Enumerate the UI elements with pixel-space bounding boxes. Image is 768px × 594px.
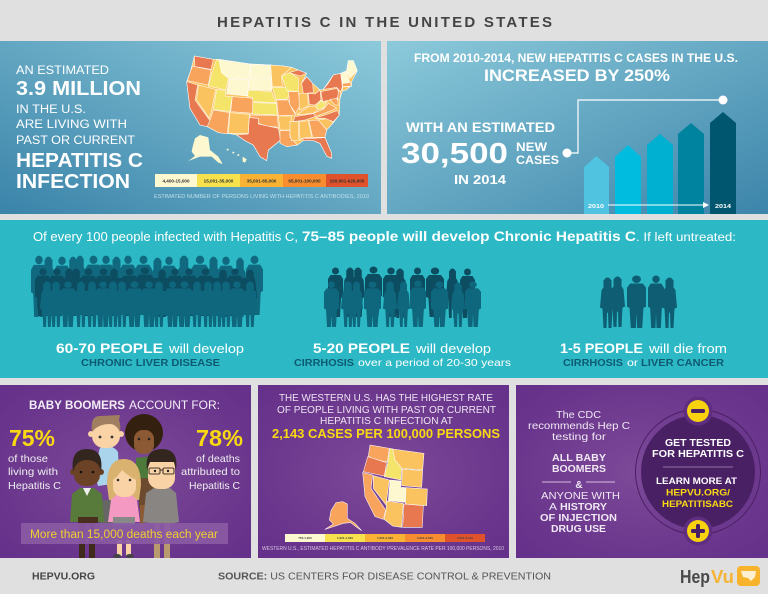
map: western states [325, 445, 427, 531]
label: 1-5 people: CIRRHOSIS [563, 357, 623, 369]
label: 5-20 people: 5-20 PEOPLE [313, 340, 410, 356]
text block: CDC recommends testing: & [575, 480, 583, 491]
text block: CDC recommends testing: The CDC [556, 410, 601, 421]
icon: minus [684, 396, 712, 426]
legend: persons living with antibodies: 35,001-65,000 [247, 178, 277, 184]
heading: increased by 250%: INCREASED BY 250% [484, 66, 670, 85]
icon: group of 1-5 people [600, 276, 677, 328]
legend: persons living with antibodies: 4,400-15,000 [162, 178, 190, 184]
panel: baby boomers [0, 385, 251, 558]
legend: prevalence rate: 1,001-1,500 [337, 536, 353, 540]
map: US states by persons living with antibodies [187, 56, 357, 164]
bar chart: rising arrows 2010 to 2014: 2014 [715, 204, 732, 210]
callout: 30,500 new cases: WITH AN ESTIMATED [406, 120, 555, 135]
label: 5-20 people [294, 340, 511, 369]
stat: 2,143 cases: 2,143 CASES PER 100,000 PERSONS [272, 426, 500, 441]
stat: 75% of those living with hepatitis C: of those [8, 453, 48, 465]
text block: 3.9 million: ARE LIVING WITH [16, 119, 127, 131]
text block: CDC recommends testing: OF INJECTION [540, 513, 617, 524]
stat: 75% of those living with hepatitis C: Hepatitis C [8, 480, 61, 492]
label: 5-20 people: CIRRHOSIS [294, 357, 354, 369]
text block: western US highest rate: THE WESTERN U.S. HAS THE HIGHEST RATE [279, 393, 493, 404]
label: 1-5 people: 1-5 PEOPLE [560, 340, 643, 356]
map caption: ESTIMATED NUMBER OF PERSONS LIVING WITH HEPATITIS C ANTIBODIES, 2010 [154, 194, 369, 200]
heading: increased by 250%: FROM 2010-2014, NEW HEPATITIS C CASES IN THE U.S. [414, 53, 738, 65]
logo: HepVu: Vu [711, 567, 734, 587]
heading: baby boomers account for [29, 400, 220, 412]
callout: 30,500 new cases: CASES [516, 155, 559, 167]
text block: CDC recommends testing: BOOMERS [552, 464, 606, 475]
stat: 75% of those living with hepatitis C: 75% [9, 425, 55, 451]
callout: get tested circle [636, 396, 760, 546]
icon: speech bubble with US map [737, 566, 760, 586]
text block: 3.9 million: 3.9 MILLION [16, 78, 141, 100]
text block: western US highest rate: OF PEOPLE LIVING WITH PAST OR CURRENT [277, 405, 496, 416]
text block: 3.9 million: PAST OR CURRENT [16, 135, 135, 147]
heading sentence: 75–85 people will develop Chronic Hepatitis C [302, 228, 636, 244]
person: front right, glasses, gray shirt [143, 449, 179, 558]
legend: prevalence rate: 2,501-3,140 [457, 536, 473, 540]
callout: get tested circle: HEPVU.ORG/ [666, 488, 730, 498]
text block: CDC recommends testing: DRUG USE [551, 524, 606, 535]
callout band: deaths each year [21, 523, 228, 544]
label: 60-70 people: 60-70 PEOPLE [56, 340, 163, 356]
text block: CDC recommends testing: ALL BABY [552, 453, 606, 464]
map caption: WESTERN U.S., ESTIMATED HEPATITIS C ANTIBODY PREVALENCE RATE PER 100,000 PERSONS, 2010 [262, 546, 504, 552]
heading sentence [33, 228, 736, 244]
label: 60-70 people: CHRONIC LIVER DISEASE [81, 357, 220, 369]
legend: persons living with antibodies [155, 174, 368, 187]
bar chart: rising arrows 2010 to 2014 [584, 112, 736, 214]
person: back right, green sweater [125, 414, 163, 535]
text block: 3.9 million: AN ESTIMATED [16, 65, 109, 77]
footer: website: HEPVU.ORG [32, 572, 95, 582]
text block: CDC recommends testing: HISTORY [560, 502, 607, 513]
footer: source: SOURCE: US CENTERS FOR DISEASE CONTROL & PREVENTION [218, 572, 551, 582]
callout: get tested circle: GET TESTED [665, 437, 731, 449]
text block: CDC recommends testing: A [549, 502, 557, 513]
person: front left, green sweater [70, 449, 104, 558]
stat: 78% of deaths attributed to hepatitis C: 78% [196, 425, 243, 451]
panel: progression of chronic hepatitis C [0, 220, 768, 378]
heading: increased by 250% [414, 53, 738, 85]
text block: western US highest rate [277, 393, 496, 427]
heading sentence: . If left untreated: [636, 232, 736, 244]
panel: 3.9 million estimate [0, 41, 381, 214]
legend: persons living with antibodies: 100,001-629,600 [330, 178, 365, 184]
bar chart: rising arrows 2010 to 2014: 2010 [588, 204, 604, 210]
stat: 78% of deaths attributed to hepatitis C: of deaths [196, 453, 240, 465]
legend: persons living with antibodies: 15,001-35,000 [204, 178, 234, 184]
legend: prevalence rate: 1,501-2,000 [377, 536, 393, 540]
text block: 3.9 million: IN THE U.S. [16, 104, 86, 116]
legend: prevalence rate [285, 534, 485, 542]
label: 1-5 people: LIVER CANCER [641, 357, 724, 369]
legend: persons living with antibodies: 65,001-100,000 [288, 178, 321, 184]
stat: 78% of deaths attributed to hepatitis C: attributed to [181, 466, 240, 478]
label: 1-5 people: or [627, 357, 639, 369]
callout: 30,500 new cases: IN 2014 [454, 173, 506, 187]
person: back left, blue shirt [88, 415, 124, 530]
text block: CDC recommends testing: ANYONE WITH [541, 491, 620, 502]
callout band: deaths each year: More than 15,000 deaths each year [30, 529, 218, 541]
panel: western US rate [258, 385, 509, 558]
label: 5-20 people: over a period of 20-30 years [358, 357, 511, 369]
logo: HepVu: Hep [680, 567, 710, 587]
label: 1-5 people: will die from [648, 342, 727, 356]
text block: 3.9 million: HEPATITIS C [16, 150, 143, 172]
callout: get tested circle: FOR HEPATITIS C [652, 448, 744, 460]
icon: plus [684, 516, 712, 546]
illustration: five baby boomers [70, 414, 179, 558]
callout: 30,500 new cases: NEW [516, 142, 547, 154]
text block: 3.9 million: INFECTION [16, 171, 130, 193]
stat: 78% of deaths attributed to hepatitis C [181, 425, 243, 492]
icon: crowd of 60-70 people [31, 256, 263, 327]
header title: HEPATITIS C IN THE UNITED STATES [217, 14, 552, 31]
label: 5-20 people: will develop [415, 342, 491, 356]
logo: HepVu [680, 566, 760, 587]
heading sentence: Of every 100 people infected with Hepatitis C, [33, 230, 298, 244]
panel: CDC recommendation [516, 385, 768, 558]
label: 60-70 people: will develop [168, 342, 244, 356]
legend: prevalence rate: 750-1,000 [298, 536, 312, 540]
heading: baby boomers account for: BABY BOOMERS [29, 400, 125, 412]
label: 1-5 people [560, 340, 727, 369]
stat: 75% of those living with hepatitis C [8, 425, 61, 492]
callout: 30,500 new cases: 30,500 [401, 138, 508, 170]
text block: CDC recommends testing: testing for [552, 432, 607, 443]
text block: western US highest rate: HEPATITIS C INFECTION AT [320, 416, 453, 427]
stat: 78% of deaths attributed to hepatitis C: Hepatitis C [189, 480, 240, 492]
icon: crowd of 5-20 people [324, 266, 481, 327]
heading: baby boomers account for: ACCOUNT FOR: [129, 400, 220, 412]
person: front centre, blond, pink shirt [107, 459, 141, 558]
callout: get tested circle: HEPATITISABC [662, 499, 733, 510]
text block: 3.9 million [16, 65, 143, 193]
stat: 75% of those living with hepatitis C: living with [8, 466, 58, 478]
text block: CDC recommends testing: recommends Hep C [528, 421, 630, 432]
text block: CDC recommends testing [528, 410, 630, 535]
legend: prevalence rate: 2,001-2,500 [417, 536, 433, 540]
connector arrow line [562, 96, 728, 158]
label: 60-70 people [56, 340, 244, 369]
panel: new cases increase [387, 41, 768, 214]
callout: 30,500 new cases [401, 120, 559, 187]
callout: get tested circle: LEARN MORE AT [656, 476, 737, 487]
